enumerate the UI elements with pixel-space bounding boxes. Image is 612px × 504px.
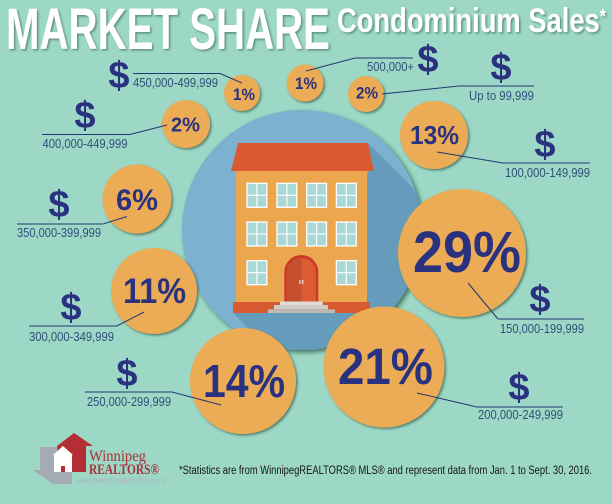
segment: up to 99,999: $	[490, 47, 512, 89]
subtitle: *	[600, 6, 606, 28]
segment: 150,000-199,999: $	[529, 279, 551, 321]
icon: white house	[53, 446, 73, 472]
logo wordmark: Winnipeg	[89, 448, 146, 465]
segment: 250,000-299,999: $	[116, 353, 138, 395]
segment: 400,000-449,999	[42, 95, 210, 151]
segment: 500,000+: 500,000+	[367, 60, 414, 74]
segment: 250,000-299,999	[85, 328, 296, 434]
segment: 200,000-249,999: 200,000-249,999	[478, 408, 563, 422]
segment: 400,000-449,999: 400,000-449,999	[42, 137, 128, 151]
segment: 150,000-199,999: 150,000-199,999	[500, 322, 584, 336]
segment: 100,000-149,999: 13%	[410, 120, 459, 150]
segment: 100,000-149,999: 100,000-149,999	[505, 166, 590, 180]
segment: 350,000-399,999: 350,000-399,999	[17, 226, 101, 240]
segment: 100,000-149,999: $	[534, 124, 556, 166]
icon: base	[233, 302, 370, 313]
logo: Winnipeg Realtors	[33, 433, 165, 485]
segment: 350,000-399,999	[17, 164, 172, 240]
segment: up to 99,999: Up to 99,999	[469, 89, 534, 103]
segment: 450,000-499,999: $	[108, 55, 130, 97]
segment: 450,000-499,999: 1%	[233, 86, 255, 104]
icon: windows	[247, 183, 356, 285]
icon: grey arrow	[33, 447, 72, 484]
segment: 150,000-199,999	[398, 189, 584, 336]
segment: 200,000-249,999: $	[508, 367, 530, 409]
icon: door	[284, 255, 318, 302]
segment: up to 99,999	[348, 47, 534, 112]
icon: building body	[236, 171, 367, 302]
logo wordmark 2: REALTORS®	[89, 462, 159, 478]
segment: 500,000+: $	[417, 39, 439, 81]
segment: 250,000-299,999: 14%	[203, 355, 285, 407]
icon: steps	[268, 302, 335, 313]
segment: 350,000-399,999: $	[48, 184, 70, 226]
segment: 400,000-449,999: $	[74, 95, 96, 137]
segment: 300,000-349,999: 11%	[123, 272, 186, 311]
segment: 300,000-349,999	[29, 248, 197, 344]
segment: 200,000-249,999	[324, 306, 563, 428]
icon: roof	[231, 143, 374, 171]
segment: 400,000-449,999: 2%	[171, 114, 200, 136]
segment: 100,000-149,999	[400, 101, 590, 180]
segment: 250,000-299,999: 250,000-299,999	[87, 395, 171, 409]
segment: 300,000-349,999: $	[60, 287, 82, 329]
segment: 350,000-399,999: 6%	[116, 184, 158, 217]
segment: 200,000-249,999: 21%	[338, 338, 433, 395]
segment: up to 99,999: 2%	[356, 84, 378, 102]
central circle with building	[181, 109, 424, 356]
segment: 450,000-499,999	[108, 55, 260, 111]
icon: house door	[61, 466, 65, 472]
segment: 450,000-499,999: 450,000-499,999	[133, 76, 218, 90]
segment: 300,000-349,999: 300,000-349,999	[29, 330, 114, 344]
icon: red house	[57, 433, 93, 472]
segment: 500,000+: 1%	[295, 75, 317, 93]
segment: 150,000-199,999: 29%	[413, 220, 521, 285]
logo url: www.winnipegrealtors.ca	[76, 476, 165, 485]
segment: 500,000+	[286, 39, 439, 102]
